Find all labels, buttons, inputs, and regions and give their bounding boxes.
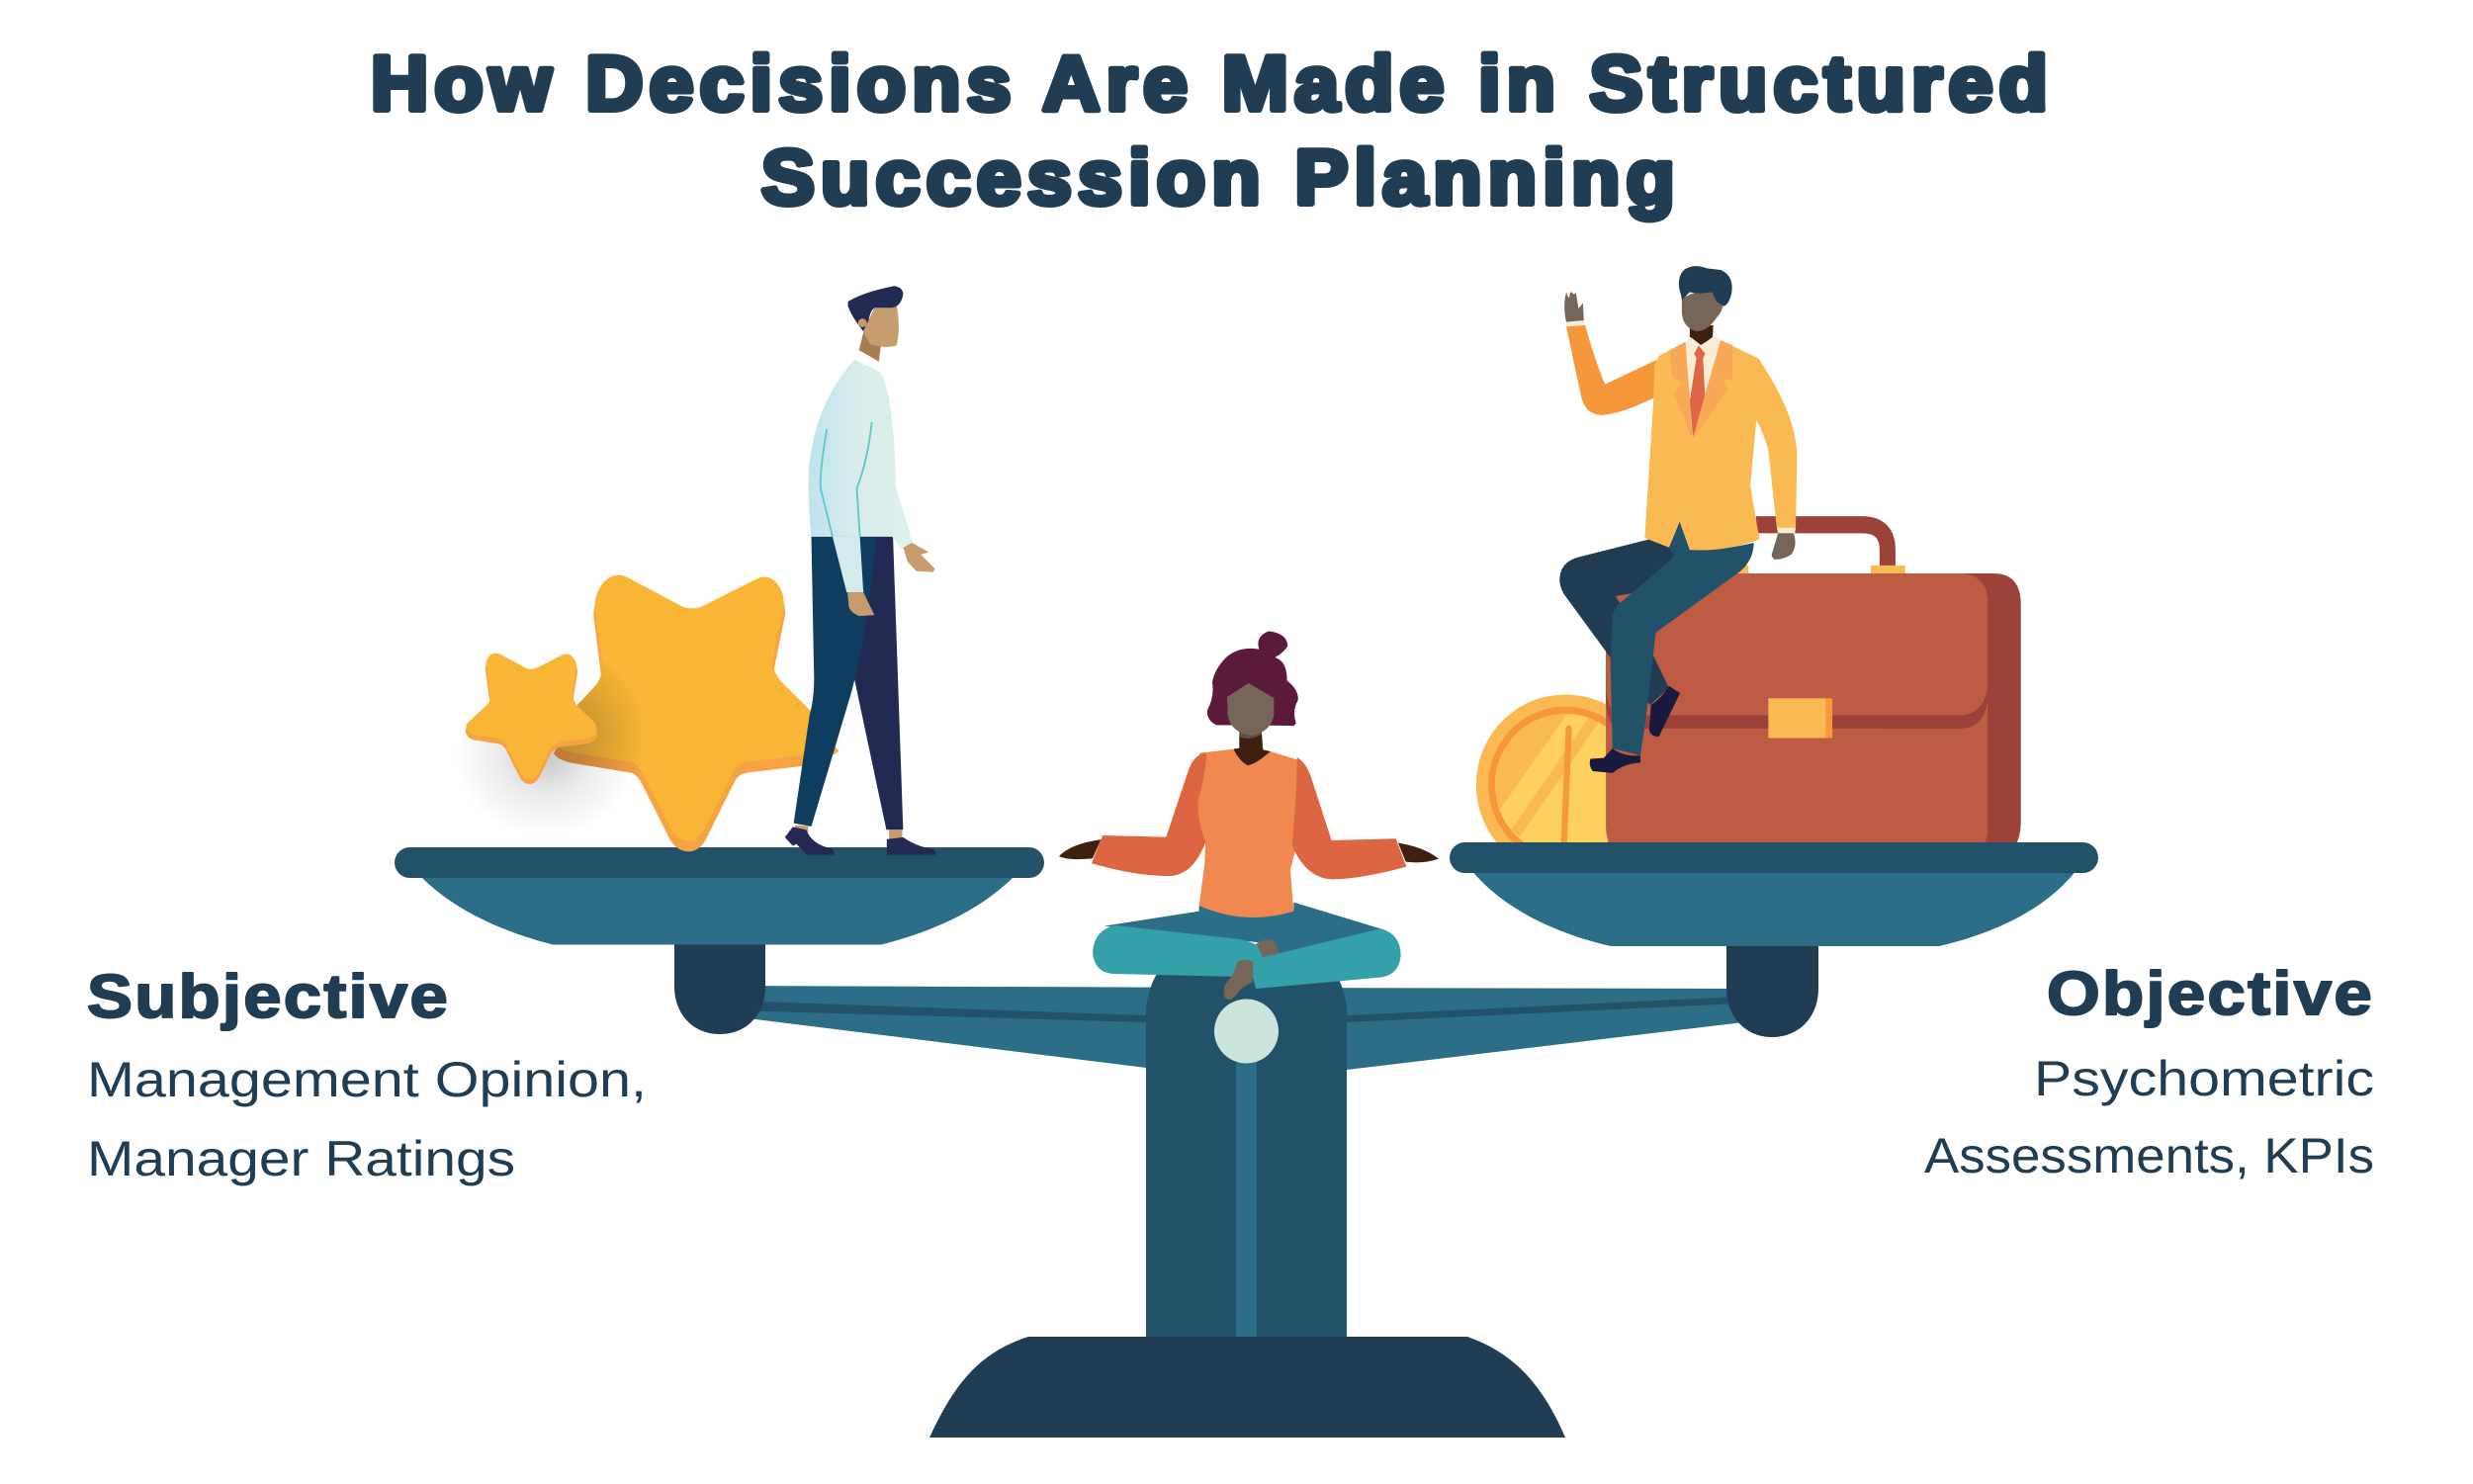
text block: subjective [87,963,647,1186]
figure: standing man [785,286,936,855]
text block: objective: Assessments, KPIs [1924,1128,2374,1183]
text block: subjective: Management Opinion, [87,1052,647,1107]
title: How Decisions Are Made in Structured [371,40,2054,127]
star shadow [455,675,636,835]
left pan [395,847,1044,1034]
scale column [1146,974,1347,1338]
icon: large star [556,575,837,850]
scale beam [732,986,1760,1070]
figure: seated man [1559,266,1797,773]
icon: briefcase [1606,525,2021,845]
title [371,40,2054,220]
right pan [1450,842,2098,1037]
icon: small star [466,654,596,783]
right objects and man [1476,266,2021,881]
figure: meditating woman [1059,631,1439,1000]
text block: objective: Psychometric [2034,1051,2374,1106]
text block: subjective: Manager Ratings [87,1131,515,1186]
scale pivot knob [1214,999,1279,1064]
text block: objective: Objective [2047,960,2374,1028]
text block: subjective: Subjective [87,963,450,1031]
icon: coin [1475,694,1609,842]
left stars and man [455,286,936,855]
text block: objective [1924,960,2374,1183]
title: Succession Planning [761,133,1681,220]
scale base [929,1337,1565,1438]
